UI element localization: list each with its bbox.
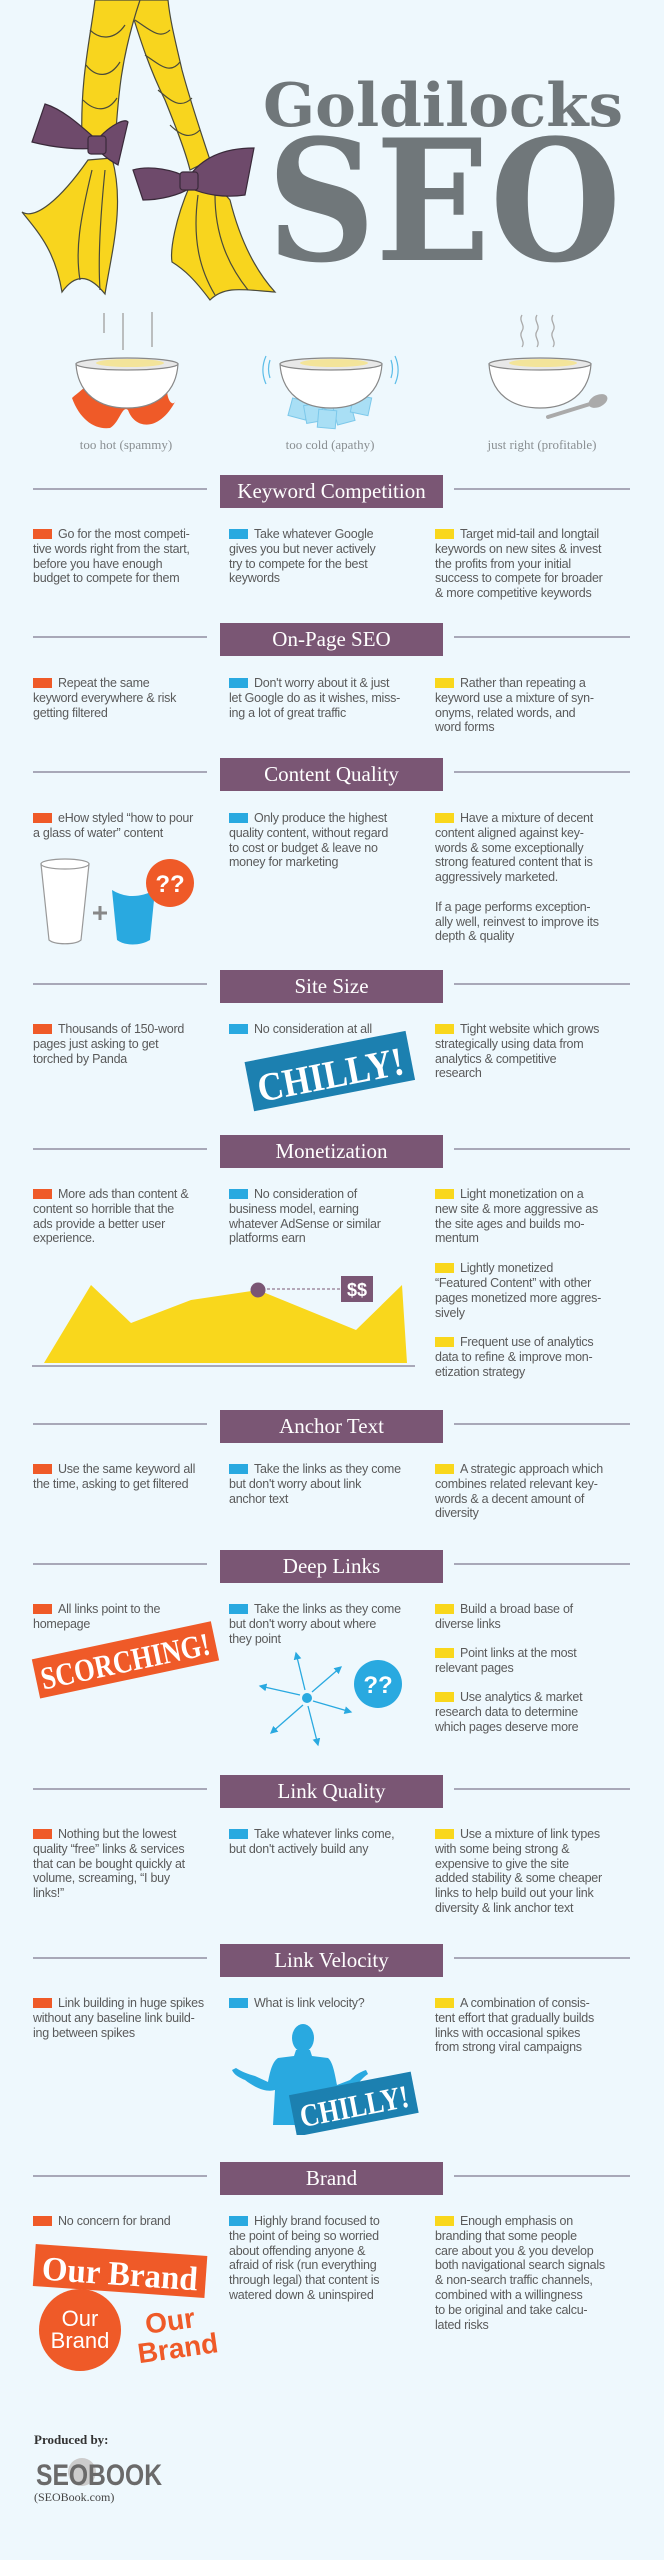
text: brand hot: No concern for brand [58,2214,170,2228]
icon: Our Brand logos: Brand [136,2327,220,2369]
text: quality right: expensive to give the site [435,1857,569,1871]
text: onpage cold [229,676,400,720]
text: anchor cold: but don't worry about link [229,1477,361,1491]
text: site hot [33,1022,184,1066]
text: quality right: with some being strong & [435,1842,569,1856]
text: content right: content aligned against key- [435,826,584,840]
text: site hot: Thousands of 150-word [58,1022,184,1036]
section: Link Velocity: Link Velocity [274,1948,389,1972]
text: deep right [435,1602,582,1734]
text: deep hot: All links point to the [58,1602,160,1616]
text: quality cold: Take whatever links come, [254,1827,394,1841]
text: quality hot: volume, screaming, “I buy [33,1871,170,1885]
text: content right: Have a mixture of decent [460,811,593,825]
text: monet right: sively Frequent use of analytics [435,1306,593,1349]
text: onpage right: word forms [435,720,494,734]
text: quality right: diversity & link anchor text [435,1901,573,1915]
left braid [82,0,140,145]
text: velocity right: A combination of consis- [460,1996,590,2010]
footer: produced by SEOBook [34,2432,174,2512]
text: monet right: Light monetization on a [460,1187,584,1201]
text: keyword right: the profits from your initial [435,557,571,571]
text: velocity hot: Link building in huge spikes [58,1996,204,2010]
text: content cold: to cost or budget & leave no [229,841,378,855]
text: content right: depth & quality [435,929,514,943]
icon: Our Brand logos: Our Brand [41,2251,199,2298]
text: deep right: which pages deserve more [435,1720,578,1734]
text: quality cold: but don't actively build any [229,1842,368,1856]
text: monet hot: More ads than content & [58,1187,188,1201]
text: keyword right [435,527,603,600]
bowl labels: just right (profitable) [487,437,597,452]
text: monet right: “Featured Content” with other [435,1276,591,1290]
text: content right: ally well, reinvest to improve its [435,915,599,929]
bowl: too hot [72,312,178,428]
text: monet right: data to refine & improve mon- [435,1350,592,1364]
text: anchor right: words & a decent amount of [435,1492,584,1506]
text: deep right: relevant pages Use analytics & market [435,1661,582,1704]
text: anchor right: combines related relevant key- [435,1477,598,1491]
text: monet hot: experience. [33,1231,95,1245]
icon: Our Brand logos: Our [143,2302,197,2340]
text: keyword cold: Take whatever Google [254,527,373,541]
icon: glasses of water: ?? [155,871,185,898]
section: Deep Links: Deep Links [283,1554,380,1578]
text: deep right: Build a broad base of [460,1602,573,1616]
icon: Our Brand logos [30,2240,225,2375]
text: keyword right: success to compete for broader [435,571,603,585]
text: monet hot: content so horrible that the [33,1202,174,1216]
text: anchor hot [33,1462,195,1491]
text: onpage cold: Don't worry about it & just [254,676,389,690]
text: brand right [435,2214,605,2332]
text: monet right: etization strategy [435,1365,525,1379]
text: site right [435,1022,599,1080]
text: keyword right: Target mid-tail and longtail [460,527,599,541]
text: velocity right: tent effort that gradually builds [435,2011,594,2025]
text: monet right: new site & more aggressive as [435,1202,598,1216]
text: content cold: Only produce the highest [254,811,387,825]
text: deep cold: but don't worry about where [229,1617,376,1631]
title: Goldilocks [263,71,623,141]
footer: produced by SEOBook: Produced by: [34,2432,109,2447]
text: velocity hot [33,1996,204,2040]
text: brand right: Enough emphasis on [460,2214,573,2228]
text: brand right: to be original and take calcu- [435,2303,587,2317]
text: keyword cold: gives you but never actively [229,542,376,556]
text: velocity cold: What is link velocity? [254,1996,365,2010]
text: monet cold: platforms earn [229,1231,305,1245]
text: onpage right: onyms, related words, and [435,706,575,720]
text: brand right: combined with a willingness [435,2288,582,2302]
bowl: just right [489,315,610,417]
text: quality cold [229,1827,394,1856]
text: monet hot: ads provide a better user [33,1217,165,1231]
text: site cold: No consideration at all [254,1022,372,1036]
text: anchor right [435,1462,603,1520]
text: monet cold: business model, earning [229,1202,359,1216]
icon: glasses of water [40,858,194,944]
text: brand cold: through legal) that content is [229,2273,379,2287]
text: content right: aggressively marketed. If a page performs exception- [435,870,590,914]
text: monet right: mentum Lightly monetized [435,1231,553,1275]
text: content right [435,811,599,943]
text: deep hot: homepage [33,1617,90,1631]
text: monet right: pages monetized more aggres- [435,1291,601,1305]
text: deep cold: they point [229,1632,281,1646]
text: content hot: a glass of water” content [33,826,163,840]
text: quality hot: that can be bought quickly at [33,1857,185,1871]
chart: monetization area: $$ [347,1280,367,1300]
text: content cold: money for marketing [229,855,338,869]
text: brand right: both navigational search signals [435,2258,605,2272]
text: brand right: branding that some people [435,2229,577,2243]
text: keyword hot [33,527,190,585]
text: onpage cold: let Google do as it wishes, miss- [229,691,400,705]
text: content right: words & some exceptionally [435,841,583,855]
text: brand cold: the point of being so worried [229,2229,379,2243]
footer: produced by SEOBook: (SEOBook.com) [34,2490,114,2504]
illustration: braids with bows [22,0,276,301]
bowl labels: too cold (apathy) [286,437,374,452]
right braid [128,0,210,170]
text: keyword hot: Go for the most competi- [58,527,190,541]
text: content hot [33,811,194,840]
text: onpage cold: ing a lot of great traffic [229,706,346,720]
icon: Our Brand logos: Our [62,2306,98,2331]
text: monet cold: No consideration of [254,1187,357,1201]
icon: shrugging person with CHILLY stamp [228,2020,423,2135]
text: content hot: eHow styled “how to pour [58,811,193,825]
section: On-Page SEO: On-Page SEO [272,627,391,651]
text: brand right: & non-search traffic channels, [435,2273,593,2287]
text: anchor cold [229,1462,401,1506]
text: onpage hot: getting filtered [33,706,108,720]
text: anchor cold: anchor text [229,1492,288,1506]
text: onpage right: keyword use a mixture of syn- [435,691,594,705]
text: keyword cold [229,527,376,585]
text: deep right: research data to determine [435,1705,578,1719]
text: keyword hot: budget to compete for them [33,571,179,585]
text: keyword hot: before you have enough [33,557,162,571]
text: keyword right: & more competitive keywords [435,586,592,600]
text: deep cold [229,1602,401,1646]
bowl: too cold [263,356,398,429]
text: anchor hot: the time, asking to get filtered [33,1477,188,1491]
text: monet hot [33,1187,188,1245]
chart: monetization area [32,1276,415,1367]
section: Anchor Text: Anchor Text [279,1414,384,1438]
section: Content Quality: Content Quality [264,762,399,786]
illustration: three bowls [72,312,608,430]
text: content cold [229,811,388,869]
text: anchor right: A strategic approach which [460,1462,603,1476]
text: site right: Tight website which grows [460,1022,599,1036]
text: anchor cold: Take the links as they come [254,1462,401,1476]
text: velocity hot: ing between spikes [33,2026,135,2040]
text: quality hot: quality “free” links & services [33,1842,184,1856]
icon: scattered arrows: ?? [363,1672,393,1699]
text: keyword hot: tive words right from the start, [33,542,190,556]
section: Brand: Brand [306,2166,357,2190]
text: onpage hot [33,676,176,720]
text: site right: strategically using data from [435,1037,583,1051]
text: quality hot [33,1827,185,1900]
icon: Our Brand logos: Brand [51,2328,109,2353]
section: Site Size: Site Size [294,974,369,998]
text: monet right [435,1187,601,1379]
text: quality hot: Nothing but the lowest [58,1827,176,1841]
text: deep cold: Take the links as they come [254,1602,401,1616]
text: brand cold: afraid of risk (run everything [229,2258,376,2272]
text: brand right: care about you & you develop [435,2244,593,2258]
text: keyword right: keywords on new sites & invest [435,542,601,556]
bows [32,104,254,200]
text: quality right: Use a mixture of link types [460,1827,600,1841]
text: quality hot: links!” [33,1886,64,1900]
text: anchor right: diversity [435,1506,479,1520]
text: content cold: quality content, without regard [229,826,388,840]
icon: scattered arrows [258,1652,402,1746]
text: content right: strong featured content that is [435,855,593,869]
text: quality right: links to help build out your link [435,1886,594,1900]
text: monet right: the site ages and builds mo- [435,1217,584,1231]
text: site right: research [435,1066,482,1080]
text: quality right [435,1827,602,1916]
text: monet cold: whatever AdSense or similar [229,1217,381,1231]
text: site right: analytics & competitive [435,1052,556,1066]
left tail [22,158,118,294]
text: velocity right [435,1996,594,2055]
text: monet cold [229,1187,381,1245]
text: deep hot [33,1602,160,1631]
section: Keyword Competition: Keyword Competition [237,479,426,503]
text: onpage hot: Repeat the same [58,676,149,690]
section: Monetization: Monetization [276,1139,387,1163]
text: velocity hot: without any baseline link build- [33,2011,195,2025]
text: keyword cold: try to compete for the best [229,557,367,571]
text: onpage right: Rather than repeating a [460,676,586,690]
text: brand right: lated risks [435,2318,489,2332]
text: velocity right: from strong viral campaigns [435,2040,582,2054]
text: brand cold: watered down & uninspired [229,2288,374,2302]
text: quality right: added stability & some cheaper [435,1871,602,1885]
text: site hot: torched by Panda [33,1052,127,1066]
text: keyword cold: keywords [229,571,280,585]
text: deep right: diverse links Point links at the most [435,1617,577,1660]
text: anchor hot: Use the same keyword all [58,1462,195,1476]
text: onpage right [435,676,594,734]
text: brand cold [229,2214,380,2303]
bowl labels [80,437,597,452]
text: brand cold: about offending anyone & [229,2244,365,2258]
text: site hot: pages just asking to get [33,1037,158,1051]
text: brand cold: Highly brand focused to [254,2214,380,2228]
right tail [172,184,275,300]
bowl labels: too hot (spammy) [80,437,172,452]
text: onpage hot: keyword everywhere & risk [33,691,176,705]
section: Link Quality: Link Quality [278,1779,385,1803]
text: velocity right: links with occasional spikes [435,2026,580,2040]
